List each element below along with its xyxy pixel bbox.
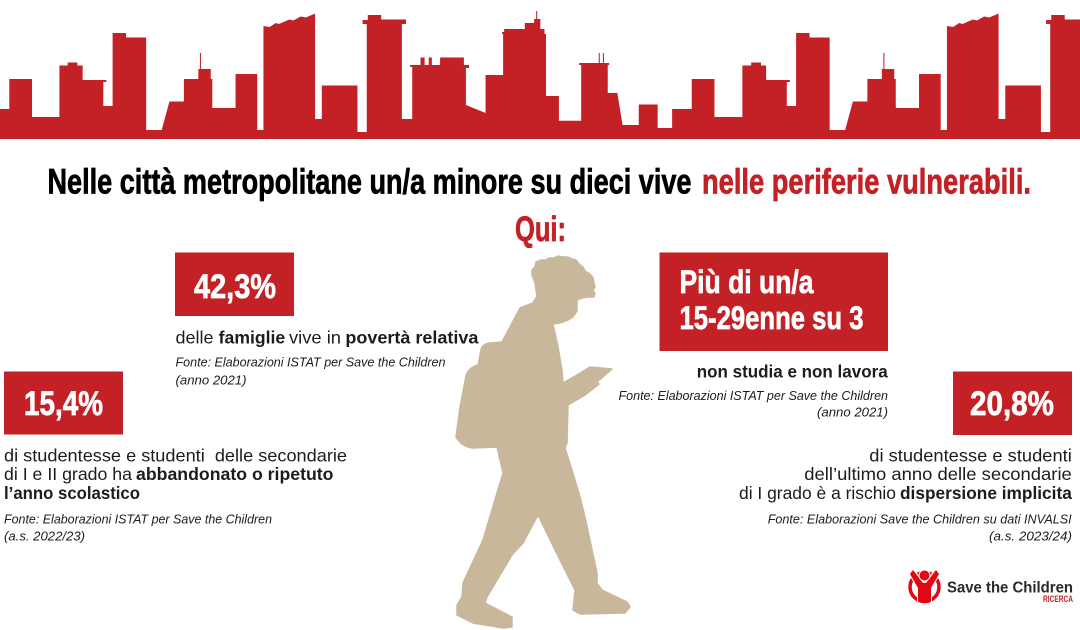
source: (a.s. 2023/24)	[989, 528, 1072, 544]
stat panel: 15,4% abbandono	[4, 372, 347, 544]
stat box 20,8%	[953, 372, 1072, 435]
stat panel: piu di un/a 15-29enne su 3	[618, 252, 888, 420]
source: Fonte: Elaborazioni ISTAT per Save the Children	[4, 512, 272, 526]
stat box 15-29enne: 15-29enne su 3	[680, 300, 864, 336]
stat box 20,8%: 20,8%	[970, 385, 1054, 423]
source	[176, 354, 446, 388]
description: l’anno scolastico	[4, 483, 140, 503]
source: Fonte: Elaborazioni ISTAT per Save the Children	[618, 388, 888, 403]
title: Nelle città metropolitane un/a minore su dieci vive	[48, 162, 692, 202]
source	[4, 512, 272, 544]
description: famiglie	[219, 328, 285, 348]
description	[739, 446, 1072, 503]
stat box 15-29enne: Più di un/a	[680, 264, 814, 300]
source: (a.s. 2022/23)	[4, 528, 85, 544]
logo: Save the Children Ricerca: Save the Children	[947, 580, 1073, 596]
description: dell’ultimo anno delle secondarie	[804, 464, 1072, 484]
stat panel: 42,3% famiglie	[175, 252, 479, 388]
description: delle	[176, 328, 214, 348]
description: abbandonato o ripetuto	[136, 464, 334, 484]
silhouette: teenager walking with phone	[456, 256, 630, 628]
city skyline banner	[0, 11, 1080, 139]
description: non studia e non lavora	[697, 362, 888, 382]
source: (anno 2021)	[176, 372, 246, 388]
description	[176, 328, 479, 348]
description: vive in	[289, 328, 341, 348]
logo: Save the Children Ricerca	[908, 568, 1073, 604]
stat panel: 20,8% dispersione implicita	[739, 372, 1072, 544]
source	[768, 512, 1072, 544]
description: povertà relativa	[345, 328, 479, 348]
stat box 15-29enne	[660, 252, 888, 351]
description: di I e II grado ha	[4, 464, 132, 484]
source	[618, 388, 888, 420]
description: di studentesse e studenti	[869, 446, 1072, 466]
stat box 42,3%	[175, 252, 294, 316]
stat box 42,3%: 42,3%	[194, 268, 276, 306]
icon: child emblem	[908, 568, 941, 602]
heading: Qui: Qui:	[515, 210, 566, 249]
description: di studentesse e studenti delle secondarie	[4, 446, 347, 466]
stat box 15,4%: 15,4%	[24, 385, 103, 423]
source: Fonte: Elaborazioni ISTAT per Save the Children	[176, 354, 446, 370]
source: Fonte: Elaborazioni Save the Children su dati INVALSI	[768, 512, 1072, 526]
description: dispersione implicita	[900, 483, 1072, 503]
stat box 15,4%	[4, 372, 123, 434]
description: di I grado è a rischio	[739, 483, 896, 503]
source: (anno 2021)	[817, 404, 888, 420]
description	[4, 446, 347, 503]
